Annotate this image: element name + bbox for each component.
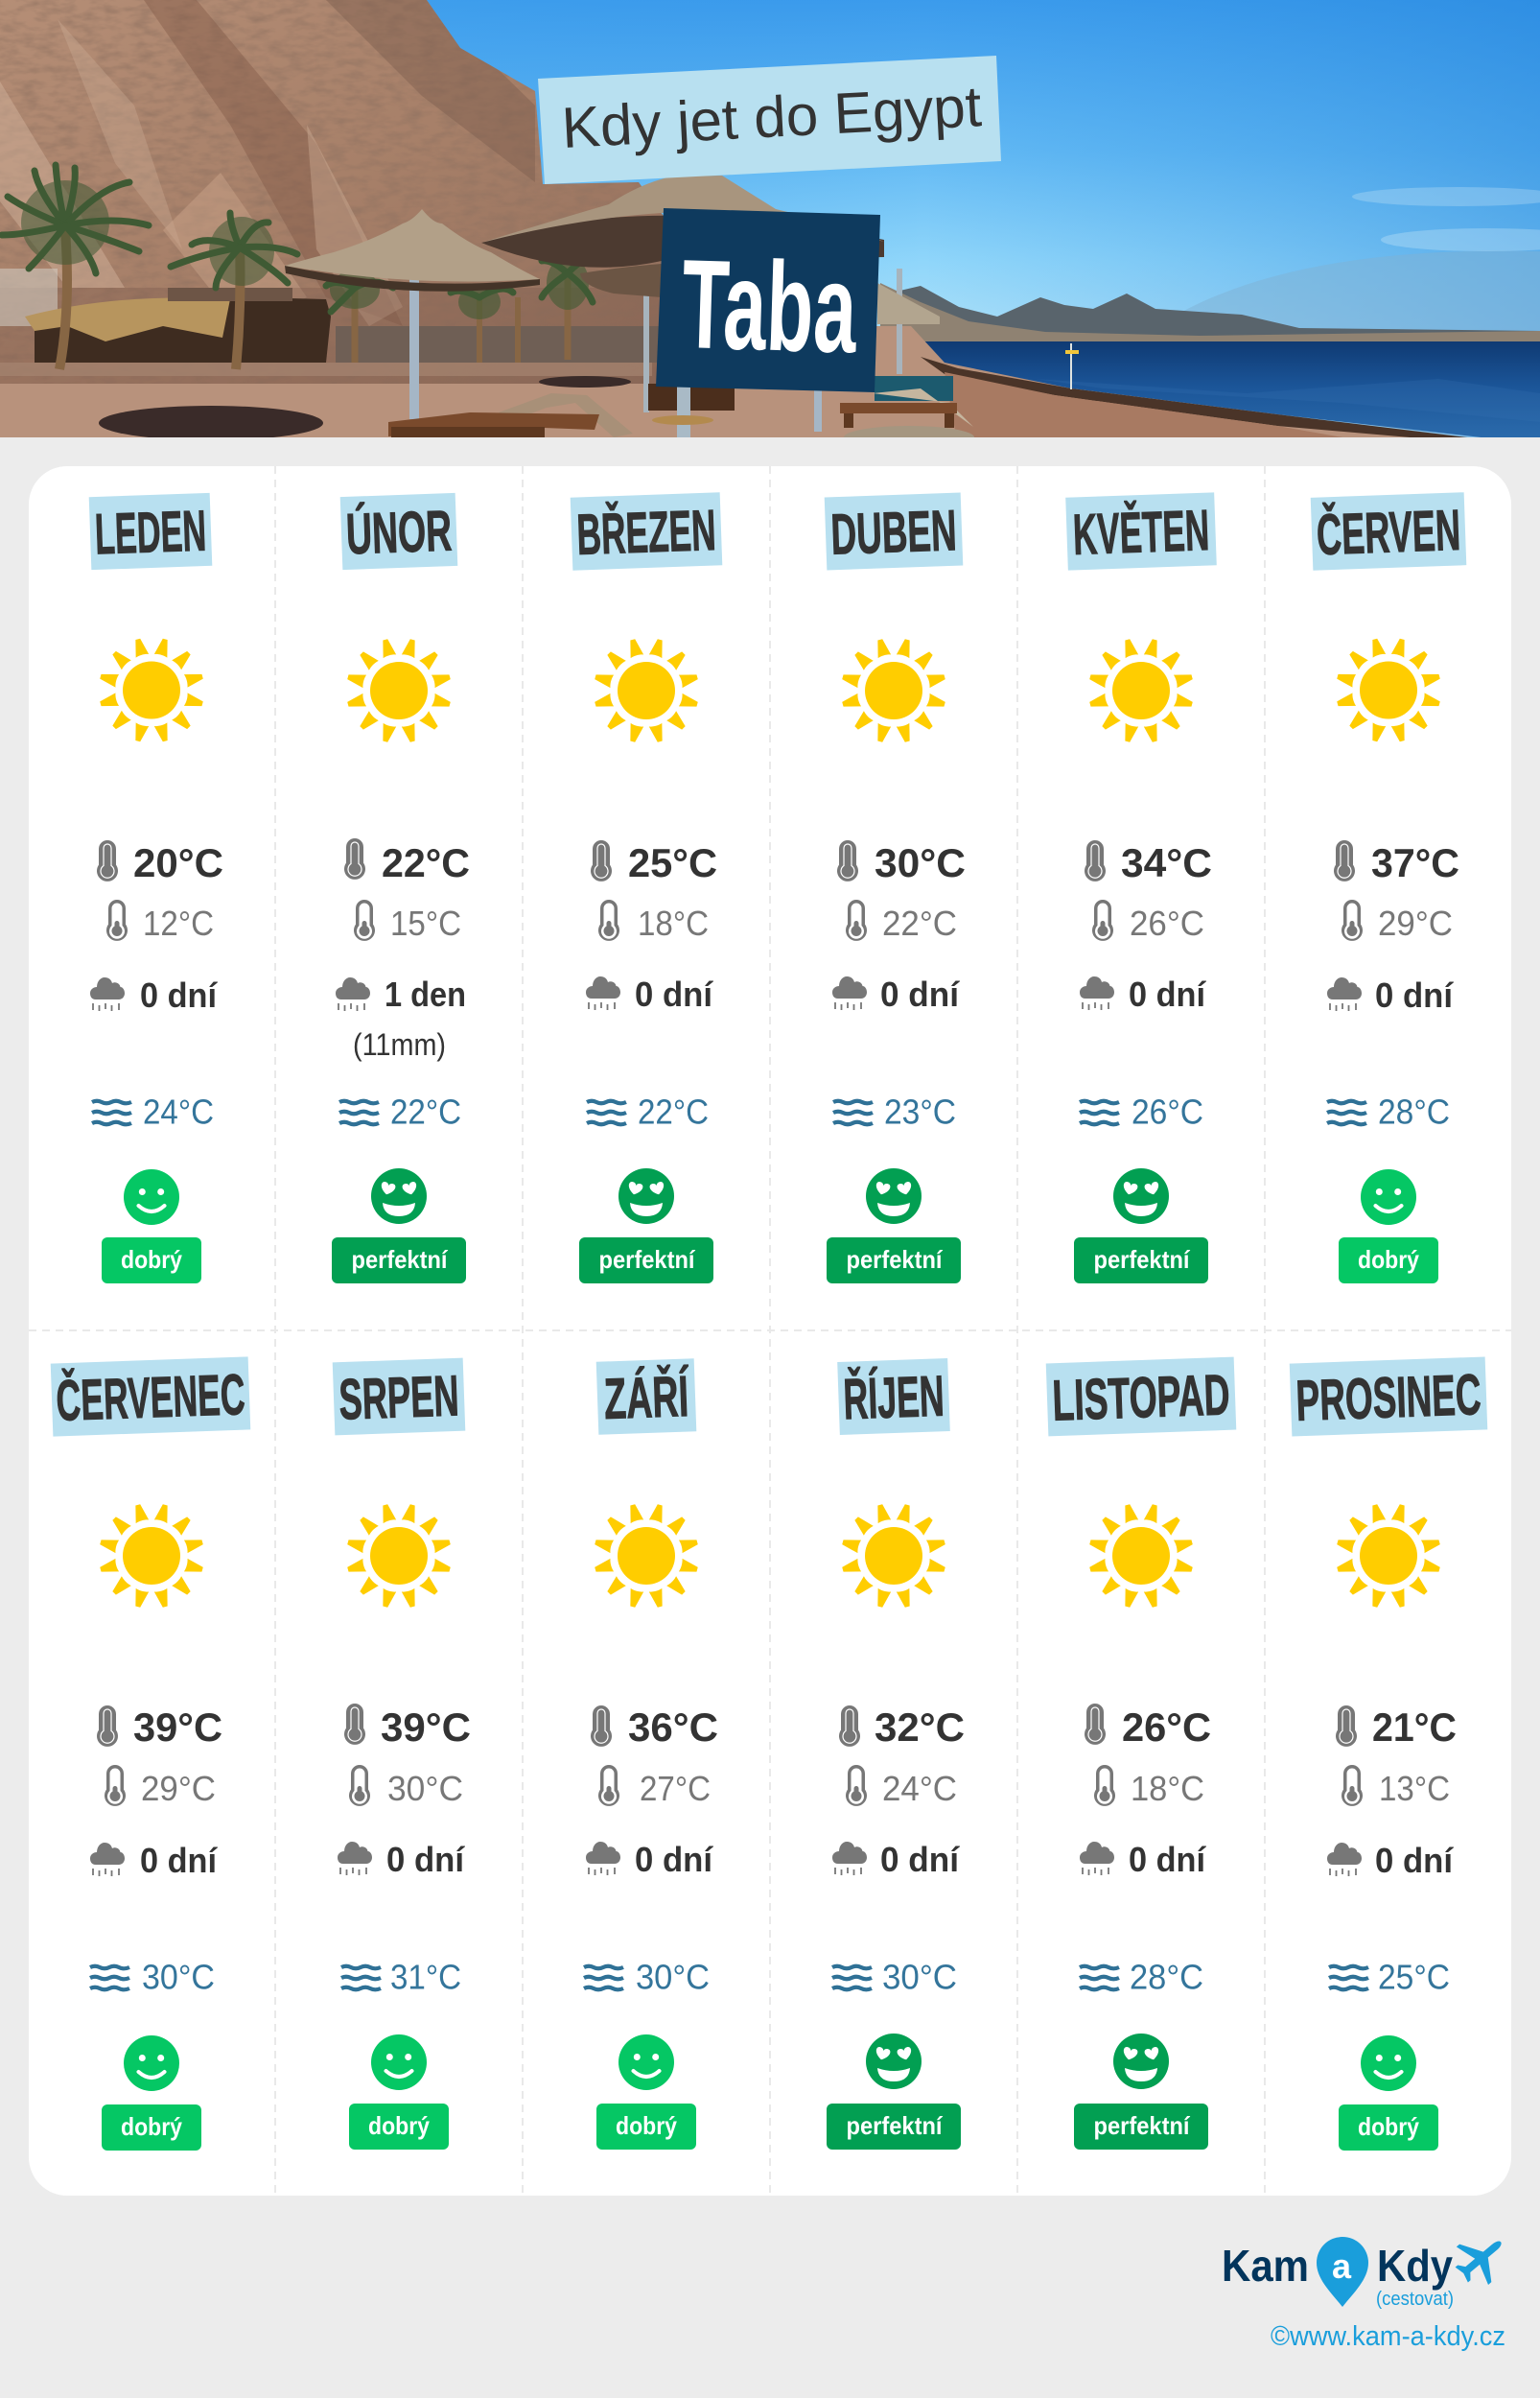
rating face — [1113, 2034, 1169, 2089]
max temperature — [344, 1704, 471, 1750]
rating badge: dobrý — [121, 1245, 182, 1274]
max temperature — [1336, 1704, 1457, 1750]
umbrellas — [285, 176, 940, 419]
max temperature: 20°C — [133, 840, 223, 885]
month: LEDEN — [89, 493, 223, 1283]
water temperature: 28°C — [1378, 1092, 1450, 1132]
water temperature — [584, 1957, 710, 1997]
water temperature: 31°C — [390, 1957, 461, 1997]
month label — [596, 1358, 696, 1435]
rain days: 0 dní — [386, 1840, 465, 1879]
min temperature — [1092, 900, 1204, 943]
water temperature: 23°C — [884, 1092, 956, 1132]
icon: location pin — [1317, 2237, 1368, 2307]
rating face — [618, 2034, 674, 2090]
min temperature: 29°C — [1378, 904, 1453, 943]
month: ČERVENEC — [51, 1356, 250, 2151]
logo: Kam a Kdy: Kam — [1222, 2241, 1309, 2291]
min temperature: 15°C — [390, 904, 461, 943]
rating badge: perfektní — [1093, 2111, 1190, 2140]
month label: SRPEN — [338, 1363, 460, 1432]
month label: KVĚTEN — [1072, 498, 1210, 567]
min temperature — [1094, 1765, 1204, 1808]
rain days: 0 dní — [140, 976, 218, 1015]
min temperature — [1342, 1765, 1450, 1808]
month: ÚNOR — [332, 493, 470, 1283]
icon: sun — [1088, 1503, 1194, 1609]
month label — [340, 493, 457, 570]
min temperature — [598, 1765, 711, 1808]
rain days: 0 dní — [1375, 1841, 1454, 1880]
rain days: 0 dní — [880, 975, 960, 1014]
rating badge — [332, 1237, 466, 1283]
rating badge: dobrý — [1358, 1245, 1419, 1274]
water temperature: 28°C — [1130, 1957, 1203, 1997]
icon: sun — [346, 1503, 452, 1609]
rating face — [124, 2035, 179, 2091]
max temperature: 37°C — [1371, 840, 1459, 885]
min temperature — [349, 1765, 463, 1808]
rating badge: perfektní — [1093, 1245, 1190, 1274]
max temperature — [1085, 1704, 1211, 1750]
max temperature: 32°C — [875, 1704, 965, 1750]
rain days — [338, 1840, 465, 1879]
rain days: 0 dní — [880, 1840, 960, 1879]
rain days — [586, 1840, 713, 1879]
water temperature: 30°C — [882, 1957, 957, 1997]
icon: sun — [1088, 638, 1194, 743]
rain days: 0 dní — [1129, 975, 1206, 1014]
month label — [825, 493, 963, 570]
min temperature — [105, 1765, 216, 1808]
water temperature: 24°C — [143, 1092, 214, 1132]
rating badge — [349, 2104, 449, 2150]
month label — [1311, 492, 1466, 571]
month: ŘÍJEN — [827, 1358, 965, 2150]
rating face — [866, 2034, 922, 2089]
rain days — [1327, 1841, 1454, 1880]
loungers — [99, 376, 974, 437]
rating face — [866, 1168, 922, 1224]
rating badge: perfektní — [846, 2111, 943, 2140]
rating face — [371, 1168, 427, 1224]
icon: sun — [346, 638, 452, 743]
water temperature — [90, 1957, 215, 1997]
icon: sun — [1336, 638, 1441, 742]
month: PROSINEC — [1290, 1356, 1487, 2151]
month label — [51, 1356, 250, 1437]
rain days — [1080, 1840, 1206, 1879]
month label — [571, 492, 722, 571]
month: KVĚTEN — [1065, 492, 1217, 1283]
rating badge — [1339, 1237, 1438, 1283]
month label: ČERVENEC — [55, 1362, 246, 1433]
rain days: 0 dní — [1129, 1840, 1206, 1879]
min temperature — [106, 900, 214, 943]
month: LISTOPAD — [1046, 1357, 1236, 2150]
water temperature: 26°C — [1132, 1092, 1203, 1132]
max temperature: 25°C — [628, 840, 717, 885]
rain days — [90, 976, 218, 1015]
max temperature: 21°C — [1372, 1704, 1457, 1750]
icon: sun — [594, 1503, 699, 1609]
title label: Kdy jet do Egypt: Kdy jet do Egypt — [560, 74, 983, 160]
month: ČERVEN — [1311, 492, 1466, 1283]
min temperature: 12°C — [143, 904, 214, 943]
rating face — [1113, 1168, 1169, 1224]
logo: Kam a Kdy: (cestovat) — [1376, 2289, 1454, 2310]
panel: monthly weather card — [29, 466, 1511, 2196]
water temperature — [341, 1957, 461, 1997]
water temperature: 25°C — [1378, 1957, 1450, 1997]
rating badge — [596, 2104, 696, 2150]
rain days — [586, 975, 713, 1014]
water temperature — [339, 1092, 461, 1132]
rain days: 0 dní — [635, 975, 713, 1014]
month: BŘEZEN — [571, 492, 722, 1283]
water temperature — [1080, 1957, 1203, 1997]
max temperature — [344, 838, 470, 885]
water temperature — [92, 1092, 214, 1132]
month label: ŘÍJEN — [842, 1364, 945, 1431]
rating face — [371, 2034, 427, 2090]
icon: sun — [1336, 1503, 1441, 1609]
min temperature: 27°C — [640, 1769, 711, 1808]
max temperature: 26°C — [1122, 1704, 1211, 1750]
month label: DUBEN — [829, 498, 958, 567]
min temperature — [1342, 900, 1453, 943]
logo: Kam a Kdy — [1222, 2223, 1517, 2310]
rain days — [1080, 975, 1206, 1014]
rating badge: perfektní — [846, 1245, 943, 1274]
rating badge — [827, 2104, 961, 2150]
rain days — [1327, 976, 1454, 1015]
month: ZÁŘÍ — [584, 1358, 718, 2150]
rating badge: dobrý — [1358, 2112, 1419, 2141]
header photo: Taba beach — [0, 0, 1540, 451]
rating badge: dobrý — [121, 2112, 182, 2141]
water temperature — [832, 1957, 957, 1997]
rating badge: dobrý — [616, 2111, 677, 2140]
min temperature — [354, 900, 461, 943]
rating badge: perfektní — [351, 1245, 448, 1274]
rating badge — [102, 1237, 201, 1283]
website credit: ©www.kam-a-kdy.cz — [1271, 2321, 1505, 2352]
min temperature — [598, 900, 709, 943]
min temperature: 30°C — [387, 1769, 463, 1808]
month label — [89, 493, 212, 570]
rating badge — [1339, 2104, 1438, 2151]
rain days — [336, 975, 466, 1014]
water temperature — [1329, 1957, 1450, 1997]
month label — [837, 1358, 950, 1435]
month: DUBEN — [825, 493, 966, 1283]
rain days — [90, 1841, 218, 1880]
water temperature — [833, 1092, 956, 1132]
icon: sun — [841, 638, 946, 743]
palms — [59, 230, 568, 369]
min temperature: 18°C — [638, 904, 709, 943]
rating face — [1361, 2035, 1416, 2091]
water temperature: 30°C — [636, 1957, 710, 1997]
water temperature: 22°C — [390, 1092, 461, 1132]
water temperature — [1080, 1092, 1203, 1132]
rain days — [832, 975, 960, 1014]
rating badge — [827, 1237, 961, 1283]
title label: Kdy jet do Egypt — [538, 56, 1001, 184]
min temperature: 26°C — [1130, 904, 1204, 943]
min temperature: 29°C — [141, 1769, 216, 1808]
month label — [1065, 492, 1217, 571]
month label — [333, 1358, 465, 1435]
rainfall amount: (11mm) — [353, 1027, 446, 1062]
rating face — [1361, 1169, 1416, 1225]
title block: Taba: Taba — [680, 233, 859, 379]
rating badge — [1074, 1237, 1208, 1283]
month label: LEDEN — [94, 498, 207, 567]
rating face — [618, 1168, 674, 1224]
icon: airplane — [1446, 2223, 1517, 2293]
month: SRPEN — [333, 1358, 471, 2150]
max temperature — [1334, 840, 1459, 885]
rating badge: dobrý — [368, 2111, 430, 2140]
max temperature: 30°C — [875, 840, 966, 885]
rain days: 0 dní — [635, 1840, 713, 1879]
month label: BŘEZEN — [575, 498, 717, 567]
max temperature: 36°C — [628, 1704, 718, 1750]
water temperature — [1327, 1092, 1450, 1132]
icon: location pin: a — [1332, 2246, 1352, 2286]
title block: Taba — [656, 208, 880, 392]
rain days: 0 dní — [1375, 976, 1454, 1015]
max temperature: 22°C — [382, 840, 470, 885]
max temperature: 34°C — [1121, 840, 1212, 885]
month label: ÚNOR — [345, 499, 453, 566]
min temperature — [846, 900, 957, 943]
min temperature: 18°C — [1131, 1769, 1204, 1808]
water temperature: 22°C — [638, 1092, 709, 1132]
min temperature: 13°C — [1379, 1769, 1450, 1808]
icon: sun — [594, 638, 699, 743]
logo: Kam a Kdy: Kdy — [1377, 2241, 1453, 2291]
icon: sun — [99, 638, 204, 742]
rating face — [124, 1169, 179, 1225]
rain days: 1 den — [385, 975, 466, 1014]
max temperature: 39°C — [381, 1704, 471, 1750]
rain days: 0 dní — [140, 1841, 218, 1880]
rating badge — [579, 1237, 713, 1283]
month label: LISTOPAD — [1051, 1362, 1231, 1433]
min temperature — [846, 1765, 957, 1808]
rain days — [832, 1840, 960, 1879]
min temperature: 24°C — [882, 1769, 957, 1808]
min temperature: 22°C — [882, 904, 957, 943]
icon: sun — [99, 1503, 204, 1609]
rating badge — [102, 2104, 201, 2151]
rating badge: perfektní — [598, 1245, 695, 1274]
water temperature — [587, 1092, 709, 1132]
month label — [1046, 1357, 1236, 1436]
rating badge — [1074, 2104, 1208, 2150]
max temperature: 39°C — [133, 1704, 222, 1750]
icon: sun — [841, 1503, 946, 1609]
water temperature: 30°C — [142, 1957, 215, 1997]
month label: ZÁŘÍ — [603, 1364, 690, 1431]
